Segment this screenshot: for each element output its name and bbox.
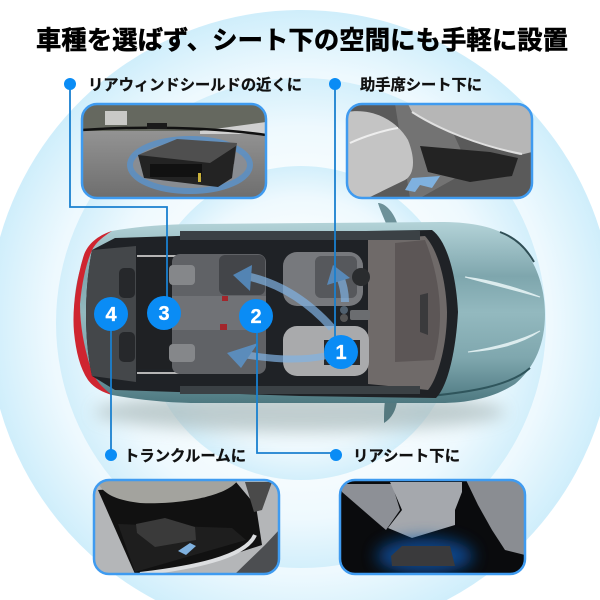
tail light xyxy=(73,231,112,395)
badge 1 xyxy=(324,335,358,369)
label: passenger seat: 助手席シート下に xyxy=(360,76,482,94)
arrow to upper rear seat xyxy=(233,265,332,328)
badge 2 xyxy=(239,299,273,333)
title: 車種を選ばず、シート下の空間にも手軽に設置 xyxy=(36,27,568,55)
car body xyxy=(74,222,545,403)
badge 4: 4 xyxy=(105,304,117,326)
connector line 4 xyxy=(110,325,112,455)
car illustration xyxy=(73,203,545,432)
photo panel: passenger seat xyxy=(347,104,532,198)
arrow to front passenger seat xyxy=(327,265,350,302)
arrow to lower rear seat xyxy=(227,343,325,368)
airflow arrows xyxy=(227,265,350,368)
rear seats xyxy=(169,254,266,374)
label: rear window: リアウィンドシールドの近くに xyxy=(88,77,302,94)
badge 2: 2 xyxy=(250,306,262,328)
wing mirror bottom xyxy=(384,401,397,423)
label: trunk room: トランクルームに xyxy=(124,448,246,465)
photo panel: rear window shelf xyxy=(82,104,266,198)
hood highlights xyxy=(430,232,540,396)
cabin xyxy=(86,230,458,398)
badge 1: 1 xyxy=(335,342,347,364)
badge 3 xyxy=(147,296,181,330)
connector line 2 xyxy=(257,325,336,453)
wing mirror top xyxy=(378,203,398,226)
photo panel: rear seat xyxy=(340,480,525,574)
side trim xyxy=(180,231,420,394)
car shadow xyxy=(95,392,505,432)
connector line 1 xyxy=(334,84,336,340)
front seats xyxy=(283,252,370,376)
label: rear seat: リアシート下に xyxy=(353,448,460,465)
photo panel: trunk room xyxy=(94,480,279,574)
trunk floor xyxy=(86,246,179,382)
badge 3: 3 xyxy=(158,303,170,325)
windshield area xyxy=(368,236,447,390)
badge 4 xyxy=(94,297,128,331)
connector line 3 xyxy=(70,84,167,300)
